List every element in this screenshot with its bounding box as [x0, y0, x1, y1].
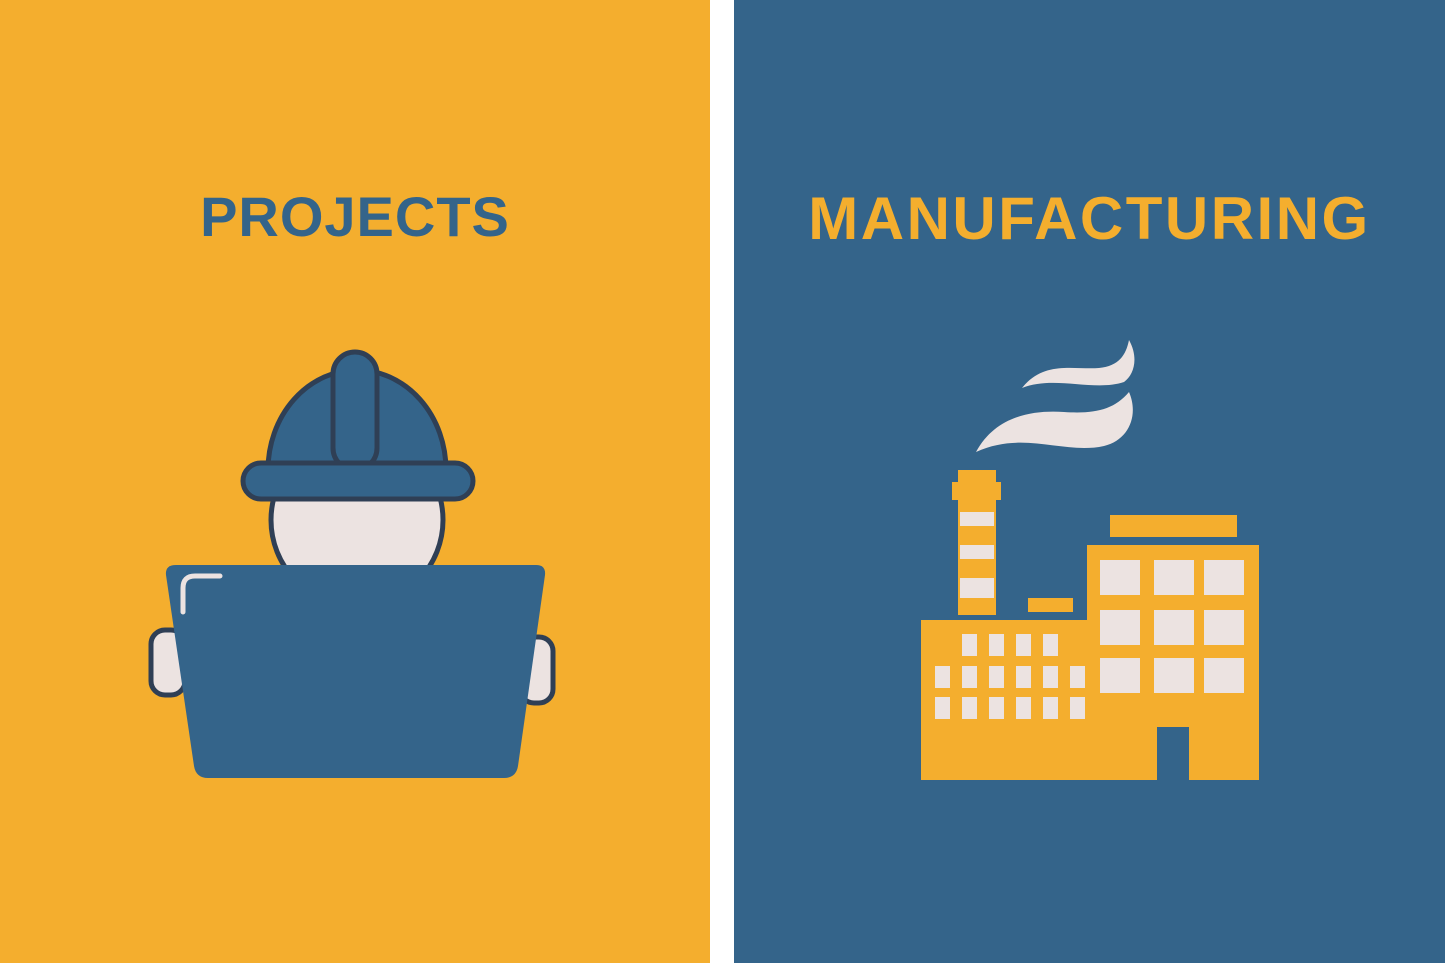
heading: projects: PROJECTS [200, 185, 510, 248]
panel: manufacturing [734, 0, 1445, 963]
icon: factory [921, 340, 1259, 780]
icon: worker with board [148, 350, 556, 778]
panel: projects [0, 0, 710, 963]
heading: manufacturing: MANUFACTURING [808, 185, 1371, 252]
